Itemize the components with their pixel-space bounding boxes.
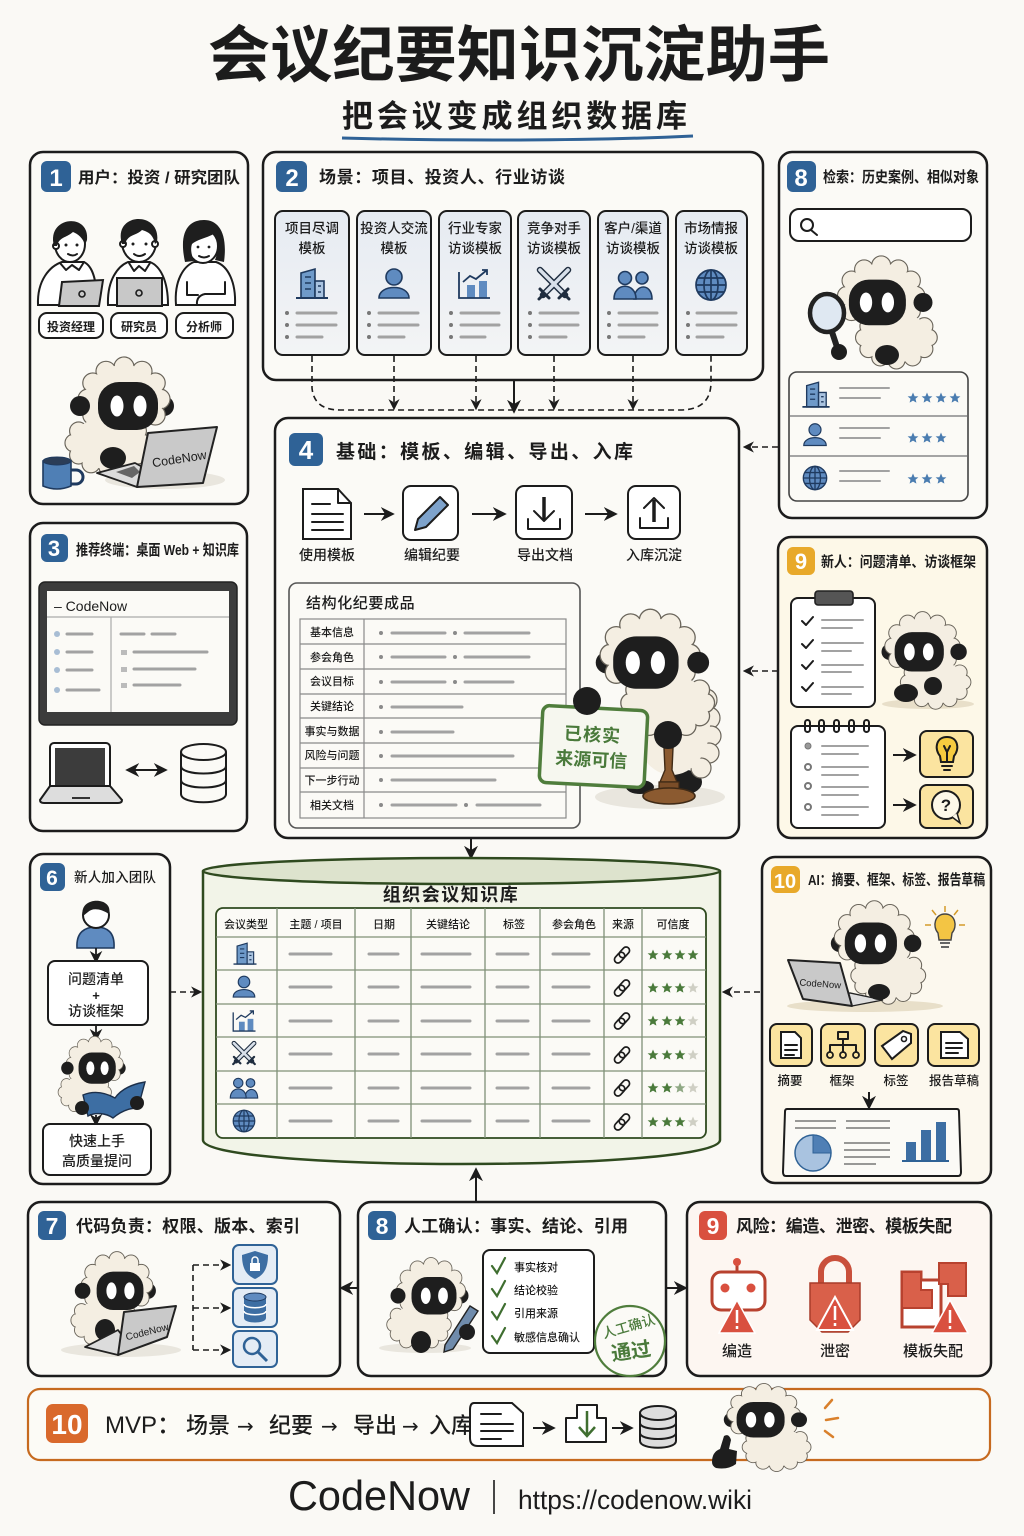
checklist: [483, 1250, 594, 1353]
arrow: [585, 513, 615, 515]
arrows: templates to foundation: [312, 356, 711, 411]
risk: leak lock: 泄密: [820, 1342, 850, 1360]
badge 2: [276, 161, 307, 192]
approved stamp: 通过: [610, 1337, 653, 1366]
row icons: [230, 943, 258, 1132]
badge 4: 4: [299, 435, 314, 465]
mascot reading: [58, 1036, 145, 1118]
sign: [539, 705, 648, 788]
badge 9: [699, 1211, 727, 1240]
heading 4: 基础：模板、编辑、导出、入库: [336, 440, 633, 463]
footer divider: [493, 1480, 495, 1514]
person: analyst: [176, 220, 235, 305]
mascot with sign and stamp: [539, 609, 725, 809]
card: investor communication: [357, 211, 431, 355]
minutes table: 基本信息: [310, 625, 354, 639]
heading 9: 风险：编造、泄密、模板失配: [736, 1216, 952, 1236]
arrow: [533, 1427, 553, 1429]
card: investor communication: 模板: [380, 240, 408, 256]
knowledge table: [216, 908, 706, 1138]
stamp: [643, 721, 695, 804]
icon: newcomer: [77, 901, 114, 948]
panel 10: MVP: [28, 1383, 990, 1472]
badge 1: [41, 161, 71, 192]
badge 10: 10: [51, 1409, 83, 1440]
approved stamp: [595, 1306, 665, 1376]
step: archive: 入库沉淀: [626, 547, 682, 563]
mascot with laptop: CodeNow: [125, 1322, 171, 1343]
card: customers and channels: 访谈模板: [606, 240, 660, 256]
arrow: newcomer panel to foundation: [745, 670, 778, 672]
minutes table: 会议目标: [310, 674, 354, 688]
arrow: [95, 1115, 97, 1124]
table header: 可信度: [656, 917, 690, 931]
badge 9: 9: [795, 549, 807, 574]
card: customers and channels: [598, 211, 668, 355]
MVP flow text: 场景: [186, 1413, 230, 1438]
tool: tags: 标签: [883, 1073, 909, 1088]
MVP flow text: →: [321, 1414, 338, 1438]
left hand: [573, 687, 601, 715]
icon: permission shield: [233, 1245, 277, 1284]
badge 8: 8: [794, 165, 808, 192]
arrow: [612, 1427, 631, 1429]
subtitle: 把会议变成组织数据库: [342, 99, 690, 134]
minutes table: 风险与问题: [304, 748, 360, 762]
table header: 来源: [612, 917, 634, 931]
tool: framework: [821, 1024, 865, 1088]
panel 3: recommended terminal: [30, 523, 247, 831]
icon: download: [566, 1405, 606, 1442]
badge 10: 10: [774, 871, 796, 893]
step: archive: [626, 486, 682, 563]
badge 1: 1: [49, 165, 63, 192]
heading 7: 代码负责：权限、版本、索引: [76, 1217, 300, 1236]
approved stamp: 人工确认: [601, 1312, 657, 1341]
badge 3: [41, 534, 68, 562]
risk: template mismatch puzzle: 模板失配: [903, 1342, 963, 1360]
panel 1: users: [30, 152, 248, 504]
step: edit: 编辑纪要: [404, 547, 460, 563]
badge 8: 8: [376, 1213, 389, 1239]
box: question list and framework: 访谈框架: [68, 1003, 124, 1019]
arrow: AI panel to database: [724, 991, 760, 993]
knowledge base cylinder: [203, 858, 720, 1164]
monitor: – CodeNow: [54, 598, 128, 614]
panel 2: scenarios: [263, 152, 763, 380]
heading 1: 用户：投资 / 研究团队: [78, 168, 240, 187]
panel 8: human confirmation: [358, 1202, 666, 1376]
MVP flow text: 入库: [429, 1413, 473, 1438]
badge 4: [289, 433, 323, 466]
icon: version database: [233, 1288, 277, 1327]
badge 10: [771, 866, 800, 893]
icon: lit bulb: [925, 906, 965, 947]
monitor: [39, 582, 237, 725]
sign: 已核实: [564, 722, 622, 746]
arrow: human confirm to risks: [666, 1287, 685, 1289]
role labels: 研究员: [121, 319, 157, 334]
risk: fabrication robot: 编造: [722, 1342, 752, 1360]
card: investor communication: 投资人交流: [360, 220, 428, 236]
arrow: foundation to database: [470, 838, 472, 857]
badge 3: 3: [48, 536, 60, 561]
icon: database: [640, 1406, 676, 1448]
card: project due diligence: 模板: [298, 240, 326, 256]
placeholder cells: [290, 954, 589, 1121]
card: customers and channels: 客户/渠道: [604, 220, 662, 236]
mascot thinking: [882, 612, 974, 709]
panel 6: newcomer joins: [30, 854, 170, 1184]
table header: 标签: [503, 917, 525, 931]
mascot with laptop: CodeNow: [799, 978, 842, 991]
box: quick start: 快速上手: [69, 1133, 125, 1149]
MVP flow text: →: [237, 1414, 254, 1438]
mascot with laptop and mug: CodeNow: [151, 448, 209, 470]
double arrow: [128, 769, 165, 771]
heading 8: 检索：历史案例、相似对象: [823, 168, 979, 186]
panel 10: AI: [762, 857, 991, 1183]
heading 8: 人工确认：事实、结论、引用: [404, 1216, 628, 1236]
box: question list and framework: +: [92, 988, 100, 1003]
structured minutes panel: [289, 583, 580, 828]
heading 6: 新人加入团队: [74, 870, 156, 885]
role labels: [39, 313, 233, 338]
badge 6: [40, 863, 65, 891]
mascot with laptop: [61, 1252, 181, 1357]
minutes table: 关键结论: [310, 699, 354, 713]
table header: 主题 / 项目: [289, 917, 343, 931]
MVP flow text: →: [402, 1414, 419, 1438]
tool: summary: [770, 1024, 812, 1088]
checklist: 敏感信息确认: [514, 1330, 580, 1344]
badge 6: 6: [46, 867, 58, 890]
mascot with laptop and mug: [43, 357, 225, 489]
database title: 组织会议知识库: [383, 885, 519, 905]
tool: framework: 框架: [829, 1073, 855, 1088]
heading 3: 推荐终端：桌面 Web + 知识库: [76, 541, 239, 559]
role labels: 分析师: [186, 319, 222, 334]
step: edit: [403, 486, 460, 563]
icon: question bubble: ?: [941, 796, 951, 815]
tool: report draft: 报告草稿: [929, 1073, 979, 1088]
panel 8: retrieval: [779, 152, 987, 518]
table header: 参会角色: [552, 917, 596, 931]
risk: leak lock: [810, 1258, 860, 1360]
result list: [789, 372, 968, 501]
card: market intelligence: 市场情报: [684, 220, 738, 236]
minutes table: [300, 619, 566, 818]
arrow: [95, 948, 97, 961]
heading 10: AI：摘要、框架、标签、报告草稿: [808, 871, 985, 889]
sign: 来源可信: [555, 748, 628, 772]
database icon: [181, 744, 226, 802]
icon: document: [470, 1403, 523, 1446]
arrows to idea and question: [893, 755, 914, 805]
icon: index search: [233, 1331, 277, 1367]
title: 会议纪要知识沉淀助手: [208, 21, 830, 89]
checklist: 引用来源: [514, 1306, 558, 1320]
minutes table: 相关文档: [310, 798, 354, 812]
card: project due diligence: [275, 211, 349, 355]
risk: template mismatch puzzle: [902, 1263, 968, 1360]
table header: [224, 917, 690, 931]
footer logo: CodeNow: [288, 1472, 471, 1519]
badge 7: [38, 1211, 66, 1240]
arrow: [95, 1025, 97, 1039]
card: project due diligence: 项目尽调: [285, 221, 339, 236]
MVP flow text: 导出: [353, 1413, 397, 1438]
table header: 日期: [373, 918, 395, 931]
credibility stars: [648, 950, 698, 1127]
panel title: 结构化纪要成品: [306, 595, 415, 612]
MVP flow text: 纪要: [269, 1413, 313, 1438]
arrow: newcomer to database: [170, 991, 200, 993]
MVP flow text: MVP：: [105, 1412, 181, 1439]
arrow: retrieval to foundation: [745, 446, 778, 448]
risk: fabrication robot: [712, 1258, 765, 1360]
badge 8: [368, 1211, 396, 1240]
step: export: 导出文档: [517, 547, 573, 563]
minutes table: 下一步行动: [304, 773, 360, 787]
step: template: [299, 489, 355, 563]
card: competitors: 访谈模板: [527, 240, 581, 256]
tool: summary: 摘要: [777, 1073, 803, 1088]
checklist: 事实核对: [514, 1260, 558, 1274]
notebook: [791, 720, 885, 828]
search box: [790, 209, 971, 241]
arrow: human confirm to database: [475, 1170, 477, 1202]
table header: 关键结论: [426, 917, 470, 931]
panel 9: newcomer checklist: [778, 537, 987, 838]
badge 10: [46, 1404, 88, 1443]
minutes table: 事实与数据: [304, 724, 360, 738]
badge 8: [787, 161, 816, 192]
card: competitors: [518, 211, 590, 355]
mascot with laptop: [787, 901, 943, 1012]
mascot thumbs up: [712, 1383, 838, 1472]
card: industry expert: 访谈模板: [448, 240, 502, 256]
panel 9: risks: [687, 1202, 991, 1376]
icon: question bubble: [920, 785, 973, 828]
badge 7: 7: [46, 1213, 58, 1239]
tool: report draft: [928, 1024, 979, 1088]
arrow: [868, 1092, 870, 1107]
box: quick start: [43, 1124, 151, 1175]
card: industry expert: 行业专家: [448, 220, 502, 236]
footer url: https://codenow.wiki: [518, 1485, 752, 1515]
mascot with magnifier: [810, 256, 937, 369]
card: competitors: 竞争对手: [527, 220, 581, 236]
icon: idea bulb: [920, 731, 973, 777]
report preview: [783, 1109, 961, 1176]
person: researcher: [108, 219, 168, 306]
panel 7: code owner: [28, 1202, 340, 1376]
arrow: [364, 513, 392, 515]
role labels: 投资经理: [47, 319, 95, 334]
box: quick start: 高质量提问: [62, 1153, 132, 1169]
mascot with pen: [379, 1258, 478, 1353]
panel 4: foundation: [275, 418, 739, 838]
clipboard checklist: [791, 591, 875, 707]
card: industry expert: [439, 211, 511, 355]
box: question list and framework: 问题清单: [68, 971, 124, 987]
heading 2: 场景：项目、投资人、行业访谈: [319, 167, 565, 187]
step: export: [516, 486, 573, 563]
card: market intelligence: 访谈模板: [684, 240, 738, 256]
badge 2: 2: [285, 165, 299, 192]
heading 9: 新人：问题清单、访谈框架: [821, 553, 976, 571]
checklist: 结论校验: [514, 1283, 558, 1297]
box: question list and framework: [48, 961, 148, 1025]
laptop: [40, 743, 122, 803]
person: investment manager: [38, 221, 103, 306]
arrow: [472, 513, 504, 515]
arrow: human confirm to code owner: [342, 1287, 358, 1289]
step: template: 使用模板: [299, 547, 355, 563]
minutes table: 参会角色: [310, 650, 354, 664]
badge 9: [787, 547, 815, 575]
dashed connectors: [193, 1265, 229, 1350]
card: market intelligence: [676, 211, 747, 355]
source links: [613, 946, 631, 1131]
table header: 会议类型: [224, 917, 268, 931]
tool: tags: [875, 1024, 918, 1088]
badge 9: 9: [707, 1213, 719, 1239]
